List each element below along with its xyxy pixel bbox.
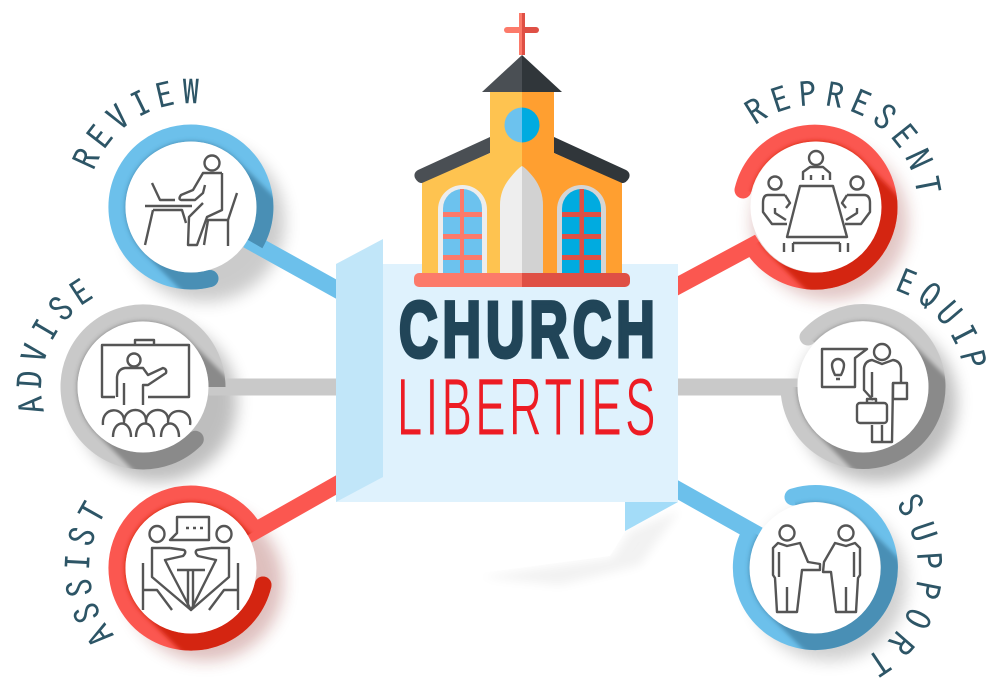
paper tab right	[625, 502, 678, 531]
church illustration	[414, 13, 630, 287]
node: review	[72, 78, 336, 309]
icon: presenter at board	[102, 340, 190, 437]
ring and connector: represent	[670, 133, 889, 290]
church base	[414, 273, 630, 287]
ring and connector: advise	[69, 313, 345, 461]
side roofs	[414, 137, 630, 183]
right window	[557, 185, 606, 274]
label: represent: REPRESENT	[744, 81, 942, 190]
node: assist	[64, 475, 336, 670]
node: represent	[678, 81, 942, 308]
ring and connector: assist	[117, 480, 345, 642]
door	[500, 166, 543, 274]
paper panel	[336, 239, 680, 585]
church walls	[422, 92, 622, 274]
label: advise: ADVISE	[16, 278, 93, 412]
title	[397, 286, 660, 454]
ring and connector: support	[670, 486, 889, 642]
icon: man with briefcase	[822, 344, 907, 442]
cross	[504, 13, 539, 55]
steeple roof	[482, 55, 562, 92]
paper fold left	[336, 239, 383, 502]
label: review: REVIEW	[72, 78, 199, 170]
round window	[504, 108, 540, 142]
icon: meeting table	[763, 151, 870, 252]
node: equip	[678, 268, 986, 490]
label: assist: ASSIST	[64, 500, 114, 644]
icon: two people at table	[143, 517, 238, 610]
title: liberties: LIBERTIES	[397, 362, 659, 454]
title: church: CHURCH	[399, 286, 660, 374]
label: support: SUPPORT	[871, 494, 942, 678]
node: advise	[16, 278, 336, 490]
node: support	[678, 480, 942, 678]
ring and connector: review	[117, 133, 345, 294]
ring and connector: equip	[670, 313, 937, 461]
icon: handshake	[773, 526, 860, 612]
label: equip: EQUIP	[896, 268, 986, 365]
icon: person at laptop	[145, 156, 237, 246]
left window	[438, 185, 487, 274]
